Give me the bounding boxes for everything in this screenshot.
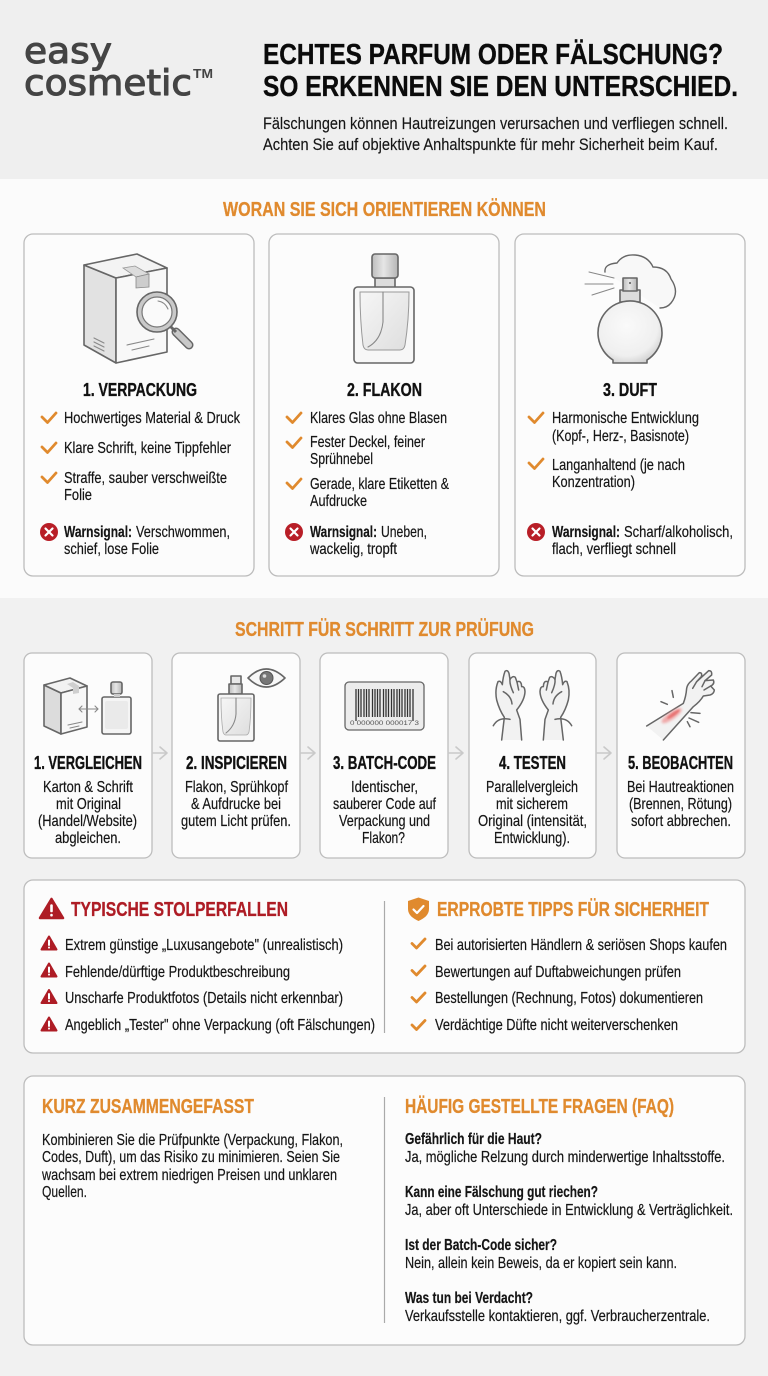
- FAQ item 1: [405, 1131, 725, 1166]
- checklist: Straffe, sauber verschweißte: [64, 470, 227, 487]
- arrow: [596, 747, 611, 759]
- logo: TM: [193, 66, 213, 81]
- checklist: [529, 410, 699, 491]
- heading: orientation: WORAN SIE SICH ORIENTIEREN KÖNNEN: [223, 198, 546, 221]
- tips list: Verdächtige Düfte nicht weiterverschenken: [435, 1017, 678, 1034]
- checklist: Sprühnebel: [310, 451, 373, 468]
- card title: 1. VERPACKUNG: [83, 379, 197, 400]
- step 3: Batch-Code: [320, 653, 448, 858]
- title: [263, 38, 738, 103]
- step text: [478, 779, 587, 847]
- FAQ item 3: [405, 1237, 677, 1272]
- warning: Scharf/alkoholisch,: [624, 524, 733, 541]
- step text: gutem Licht prüfen.: [181, 813, 291, 830]
- warning: flach, verfliegt schnell: [552, 541, 676, 558]
- heading: summary: KURZ ZUSAMMENGEFASST: [42, 1096, 254, 1118]
- heading: pitfalls: TYPISCHE STOLPERFALLEN: [71, 899, 288, 921]
- summary text: [41, 1132, 343, 1201]
- pitfall list: Unscharfe Produktfotos (Details nicht erkennbar): [65, 990, 343, 1007]
- step text: Verpackung und: [339, 813, 430, 830]
- intro text: [263, 114, 728, 154]
- icon: barcode label: [345, 682, 424, 730]
- checklist: Folie: [64, 487, 92, 504]
- checklist: Klares Glas ohne Blasen: [310, 410, 447, 427]
- step text: sauberer Code auf: [333, 796, 436, 813]
- step text: [333, 779, 436, 847]
- step title: 3. BATCH-CODE: [333, 752, 436, 773]
- FAQ item 2: Kann eine Fälschung gut riechen?: [405, 1184, 598, 1201]
- arrow: [448, 747, 463, 759]
- step 5: Beobachten: [617, 653, 745, 858]
- step text: mit Original: [56, 796, 121, 813]
- step text: & Aufdrucke bei: [191, 796, 281, 813]
- step title: 2. INSPICIEREN: [186, 752, 287, 773]
- FAQ item 3: Ist der Batch-Code sicher?: [405, 1237, 557, 1254]
- step text: (Handel/Website): [38, 813, 137, 830]
- warning: schief, lose Folie: [64, 541, 159, 558]
- step 2: Inspizieren: [172, 653, 300, 858]
- summary text: wachsam bei extrem niedrigen Preisen und unklaren: [41, 1167, 337, 1184]
- checklist: Klare Schrift, keine Tippfehler: [64, 440, 232, 457]
- warning: wackelig, tropft: [309, 541, 397, 558]
- panel: Duft: [515, 234, 745, 576]
- arrow: [152, 747, 167, 759]
- step text: mit sicherem: [496, 796, 568, 813]
- logo: easy: [24, 31, 112, 72]
- pitfall list: Fehlende/dürftige Produktbeschreibung: [65, 964, 290, 981]
- panel: Flakon: [269, 234, 499, 576]
- step text: Parallelvergleich: [486, 779, 578, 796]
- warning: Warnsignal:: [552, 524, 620, 541]
- icon: spray bottle with cloud: [585, 255, 676, 363]
- step title: 1. VERGLEICHEN: [34, 752, 142, 773]
- warning: Warnsignal:: [310, 524, 377, 541]
- step text: Flakon, Sprühkopf: [185, 779, 288, 796]
- icon: box with magnifier: [84, 254, 189, 363]
- step text: sofort abbrechen.: [631, 813, 731, 830]
- FAQ item 4: Was tun bei Verdacht?: [405, 1290, 533, 1307]
- icon: shield: [408, 898, 429, 921]
- panel: Verpackung: [24, 234, 254, 576]
- warning: Uneben,: [381, 524, 427, 541]
- step text: Identischer,: [351, 779, 418, 796]
- FAQ item 1: Gefährlich für die Haut?: [405, 1131, 542, 1148]
- step text: [627, 779, 734, 830]
- step text: Original (intensität,: [478, 813, 587, 830]
- checklist: [287, 410, 449, 510]
- checklist: Fester Deckel, feiner: [310, 434, 426, 451]
- card title: 2. FLAKON: [347, 379, 422, 400]
- icon: irritated arm: [647, 671, 714, 740]
- icon: large warning triangle: [40, 899, 63, 918]
- panel: summary and FAQ: [24, 1076, 745, 1345]
- pitfall list: Extrem günstige „Luxusangebote" (unrealistisch): [65, 937, 343, 954]
- warning: [40, 523, 230, 558]
- checklist: Langanhaltend (je nach: [552, 457, 685, 474]
- warning: [285, 523, 427, 558]
- logo: cosmetic: [24, 63, 192, 104]
- warning: Verschwommen,: [136, 524, 230, 541]
- FAQ item 4: [405, 1290, 710, 1325]
- step text: [181, 779, 291, 830]
- warning: Warnsignal:: [64, 524, 132, 541]
- summary text: Quellen.: [42, 1184, 87, 1201]
- FAQ item 2: [405, 1184, 733, 1219]
- card title: 3. DUFT: [603, 379, 658, 400]
- pitfall list: [42, 936, 375, 1034]
- icon: two wrists: [493, 671, 572, 740]
- icon: bottle with eye: [218, 669, 285, 741]
- tips list: [412, 937, 727, 1034]
- step 1: Vergleichen: [24, 653, 152, 858]
- step text: abgleichen.: [55, 830, 121, 847]
- heading: FAQ: HÄUFIG GESTELLTE FRAGEN (FAQ): [405, 1095, 674, 1118]
- icon: box and bottle comparison: [44, 678, 131, 734]
- checklist: Gerade, klare Etiketten &: [310, 476, 449, 493]
- heading: steps: SCHRITT FÜR SCHRITT ZUR PRÜFUNG: [235, 618, 534, 641]
- step text: (Brennen, Rötung): [629, 796, 732, 813]
- logo: [24, 31, 213, 104]
- step text: Flakon?: [362, 830, 405, 847]
- checklist: (Kopf-, Herz-, Basisnote): [552, 428, 689, 445]
- checklist: Harmonische Entwicklung: [552, 410, 699, 427]
- step text: Karton & Schrift: [43, 779, 133, 796]
- step text: Bei Hautreaktionen: [627, 779, 734, 796]
- summary text: Codes, Duft), um das Risiko zu minimieren. Seien Sie: [42, 1149, 340, 1166]
- summary text: Kombinieren Sie die Prüfpunkte (Verpackung, Flakon,: [42, 1132, 343, 1149]
- FAQ item 3: Nein, allein kein Beweis, da er kopiert sein kann.: [405, 1255, 677, 1272]
- step title: 4. TESTEN: [499, 752, 566, 773]
- checklist: Konzentration): [552, 474, 635, 491]
- checklist: Hochwertiges Material & Druck: [64, 410, 241, 427]
- icon: barcode label: 0 000000 000017 3: [350, 721, 420, 727]
- checklist: [42, 410, 241, 504]
- step text: Entwicklung).: [494, 830, 570, 847]
- tips list: Bestellungen (Rechnung, Fotos) dokumentieren: [435, 990, 703, 1007]
- checklist: Aufdrucke: [310, 493, 367, 510]
- step text: [38, 779, 137, 847]
- icon: perfume bottle: [354, 254, 414, 363]
- panel: pitfalls and tips: [24, 880, 745, 1053]
- warning: [527, 523, 733, 558]
- pitfall list: Angeblich „Tester" ohne Verpackung (oft Fälschungen): [65, 1017, 375, 1034]
- arrow: [300, 747, 315, 759]
- tips list: Bewertungen auf Duftabweichungen prüfen: [435, 964, 681, 981]
- step 4: Testen: [469, 653, 596, 858]
